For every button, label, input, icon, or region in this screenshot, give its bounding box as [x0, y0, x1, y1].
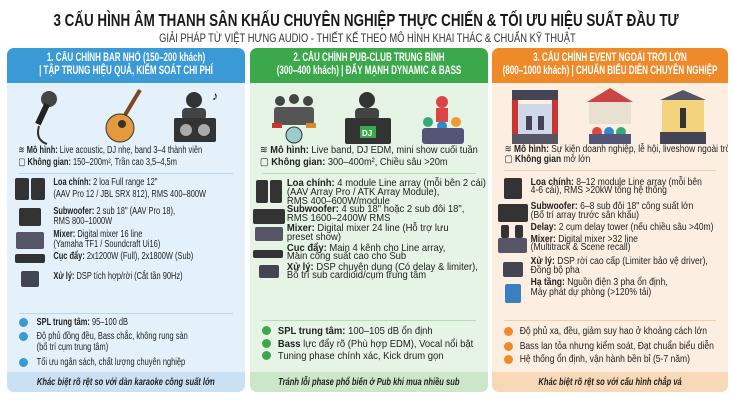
text block: panel 2 details: Loa chính: 4 module Line array (mỗi bên 2 cái)	[287, 177, 486, 189]
text block: panel 1 details: Subwoofer: 2 sub 18" (AAV Pro 18),	[53, 206, 175, 217]
footer: panel 2: Tránh lỗi phase phổ biến ở Pub khi mua nhiều sub	[278, 376, 459, 388]
illustrations: mic, guitar, dj: ♪	[212, 89, 218, 103]
text block: panel 1 details: (bố trí cụm trung tâm)	[37, 342, 108, 353]
text block: panel 1 details: RMS 800–1000W	[53, 216, 112, 227]
text block: panel 1 details: Xử lý: DSP tích hợp/rời (Cắt tần 90Hz)	[53, 271, 183, 282]
illustrations: mic, guitar, dj	[35, 89, 218, 145]
text block: panel 3 details: Hệ thống ổn định, vận hành bền bỉ (5-7 năm)	[520, 354, 690, 365]
header: panel 3: (800–1000 khách) | CHUẨN BIỂU DIỄN CHUYÊN NGHIỆP	[503, 65, 717, 77]
panel: pub-club	[250, 48, 488, 392]
text block: panel 2 details: RMS 400–600W/module	[287, 195, 390, 207]
text block: panel 3 details: ▢ Không gian mở lớn	[505, 154, 590, 165]
text block: panel 3 details: Đồng bộ pha	[531, 265, 580, 276]
text block: panel 3 details	[505, 143, 728, 365]
text block: panel 1 details: Loa chính: 2 loa Full range 12"	[53, 177, 157, 188]
illustrations: band, dj, crowd	[272, 92, 464, 144]
footer: panel 1	[7, 372, 245, 392]
text block: panel 2 details: ▢ Không gian: 300–400m², Chiều sâu >20m	[260, 157, 448, 168]
header: panel 1	[7, 48, 245, 83]
text block: panel 2 details: (AAV Array Pro / ATK Array Module),	[287, 186, 439, 198]
text block: panel 2 details: Mixer: Digital mixer 24 line (Hỗ trợ lưu	[287, 222, 449, 234]
footer: panel 1: Khác biệt rõ rệt so với dàn karaoke công suất lớn	[37, 376, 215, 388]
header: panel 3: 3. CẤU CHÌNH EVENT NGOÀI TRỜI LỚN	[533, 52, 687, 64]
text block: panel 3 details: Mixer: Digital mixer >32 line	[531, 234, 638, 245]
header: panel 1: 1. CẤU CHÌNH BAR NHỎ (150–200 khách)	[47, 52, 205, 64]
text block: panel 3 details: (Multitrack & Scene recall)	[531, 242, 631, 253]
checks	[19, 318, 28, 327]
title: 3 CẤU HÌNH ÂM THANH SÂN KHẤU CHUYÊN NGHIỆP THỰC CHIẾN & TỐI ƯU HIỆU SUẤT ĐẦU TƯ	[53, 10, 679, 30]
text block: panel 1 details: Cục đẩy: 2x1200W (Full), 2x1800W (Sub)	[53, 251, 193, 262]
text block: panel 2 details: preset show)	[287, 231, 341, 243]
text block: panel 3 details: Máy phát dự phòng (>120% tải)	[531, 287, 651, 298]
checks	[504, 327, 513, 336]
text block: panel 2 details: Cục đẩy: Main 4 kênh cho Line array,	[287, 242, 445, 254]
checks	[262, 326, 271, 335]
header: panel 2: 2. CẤU CHÌNH PUB-CLUB TRUNG BÌNH	[293, 52, 445, 64]
footer: panel 2	[250, 372, 488, 392]
text block: panel 1 details: Độ phủ đồng đều, Bass chắc, không rung sàn	[37, 331, 188, 342]
text block: panel 2 details: Tuning phase chính xác, Kick drum gọn	[278, 350, 444, 362]
illustrations: stages	[512, 88, 706, 144]
subtitle: GIẢI PHÁP TỪ VIỆT HƯNG AUDIO - THIẾT KẾ THEO MÔ HÌNH KHAI THÁC & CHUẨN KỸ THUẬT	[159, 31, 576, 45]
text block: panel 2 details: Subwoofer: 4 sub 18" hoặc 2 sub đôi 18",	[287, 203, 464, 215]
text block: panel 2 details: Bass lực đẩy rõ (Phù hợp EDM), Vocal nổi bật	[278, 338, 473, 350]
panel: bar nho	[7, 48, 245, 392]
text block: panel 1 details: Tối ưu ngân sách, chất lượng chuyên nghiệp	[37, 357, 185, 368]
text block: panel 1 details: ▢ Không gian: 150–200m², Trần cao 3,5–4,5m	[18, 157, 177, 168]
text block: panel 3 details: Bass lan tỏa nhưng kiểm soát, Đạt chuẩn biểu diễn	[520, 341, 714, 352]
text block: panel 3 details: Loa chính: 8–12 module Line array (mỗi bên	[531, 177, 702, 188]
icons: equipment	[15, 178, 45, 287]
illustrations: band, dj, crowd: DJ	[362, 129, 372, 138]
text block: panel 2 details: SPL trung tâm: 100–105 dB ổn định	[278, 325, 433, 337]
text block: panel 2 details: Bố trí sub cardioid/cụm trung tâm	[287, 269, 426, 281]
text block: panel 2 details	[260, 145, 486, 362]
panel: event	[492, 48, 728, 392]
icons: equipment	[498, 178, 528, 303]
text block: panel 1 details: Mixer: Digital mixer 16 line	[53, 229, 142, 240]
text block: panel 3 details: Xử lý: DSP rời cao cấp (Limiter bảo vệ driver),	[531, 256, 708, 267]
text block: panel 2 details: Main công suất cao cho Sub	[287, 250, 406, 262]
text block: panel 3 details: Delay: 2 cụm delay tower (nếu chiều sâu >40m)	[531, 222, 714, 233]
text block: panel 1 details	[18, 145, 206, 368]
text block: panel 2 details: Xử lý: DSP chuyên dụng (Có delay & limiter),	[287, 261, 478, 273]
text block: panel 2 details: RMS 1600–2400W RMS	[287, 212, 390, 224]
text block: panel 3 details: 4-6 cái), RMS >20kW tổng hệ thống	[531, 185, 667, 196]
text block: panel 1 details: SPL trung tâm: 95–100 dB	[37, 317, 128, 328]
text block: panel 1 details: (Yamaha TF1 / Soundcraft Ui16)	[53, 239, 160, 250]
icons: equipment	[253, 180, 285, 278]
footer: panel 3: Khác biệt rõ rệt so với cấu hình chắp vá	[538, 376, 682, 388]
text block: panel 1 details: (AAV Pro 12 / JBL SRX 812), RMS 400–800W	[53, 189, 206, 200]
text block: panel 3 details: (Bố trí array trước sân khấu)	[531, 210, 639, 221]
header: panel 3	[492, 48, 728, 83]
footer: panel 3	[492, 372, 728, 392]
text block: panel 3 details: Hạ tầng: Nguồn điện 3 pha ổn định,	[531, 277, 668, 288]
text block: panel 3 details: Độ phủ xa, đều, giảm suy hao ở khoảng cách lớn	[520, 326, 707, 337]
header: panel 2: (300–400 khách) | ĐẨY MẠNH DYNAMIC & BASS	[277, 65, 461, 77]
text block: panel 3 details: ≋ Mô hình: Sự kiện doanh nghiệp, lễ hội, liveshow ngoài trời	[505, 144, 728, 155]
text block: panel 1 details: ≋ Mô hình: Live acoustic, DJ nhẹ, band 3–4 thành viên	[18, 145, 202, 156]
text block: panel 3 details: Subwoofer: 6–8 sub đôi 18" công suất lớn	[531, 201, 693, 212]
header: panel 1: | TẬP TRUNG HIỆU QUẢ, KIỂM SOÁT CHI PHÍ	[39, 65, 213, 77]
header: panel 2	[250, 48, 488, 83]
text block: panel 2 details: ≋ Mô hình: Live band, DJ EDM, mini show cuối tuần	[260, 145, 478, 156]
